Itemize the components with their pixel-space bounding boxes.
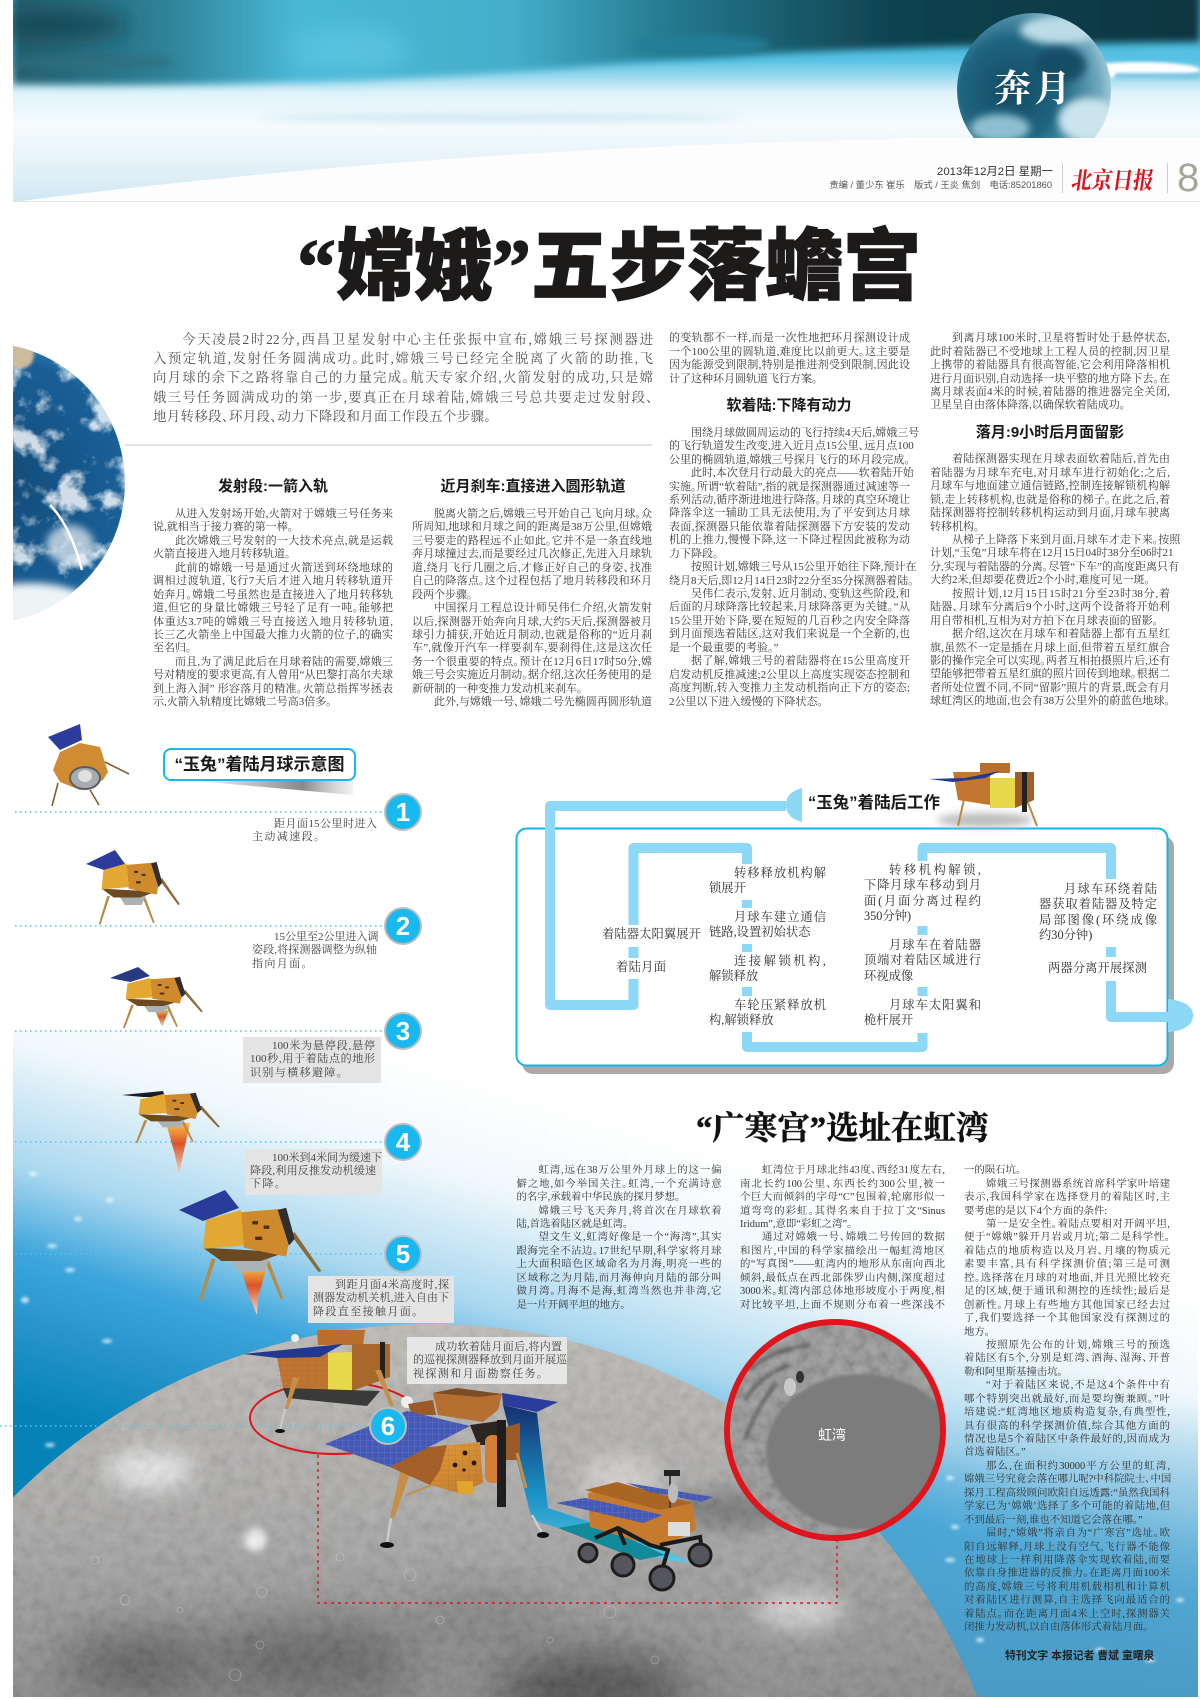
column: near-moon braking: 自己的降落点。这个过程包括了地月转移段和环月	[412, 575, 652, 587]
column: lunar landing: 用自带相机,互相为对方拍下在月球表面的留影。	[930, 615, 1158, 627]
column: soft landing: 降落伞这一辅助工具无法使用,为了平安到达月球	[669, 507, 910, 519]
step 1 text: 距月面15公里时进入	[274, 818, 377, 830]
main title: “嫦娥”五步落蟾宫	[297, 222, 921, 310]
intro paragraph: 娥三号任务圆满成功的第一步,要真正在月球着陆,嫦娥三号总共要走过发射段、	[153, 390, 653, 405]
Sinus Iridum column 3: 一的陨石坑。	[964, 1165, 1021, 1176]
lunar rover	[556, 1470, 713, 1590]
Sinus Iridum column 2: 倾斜,最低点在西北部侏罗山内侧,深度超过	[740, 1273, 945, 1284]
step 4 text: 降段,利用反推发动机缓速	[250, 1165, 376, 1177]
Sinus Iridum column 3: 阳自远解释,月球上没有空气,飞行器不能像	[964, 1542, 1170, 1553]
Sinus Iridum column 3: 具有很高的科学探测价值,综合其他方面的	[964, 1421, 1170, 1432]
flow step: wheel release: 构,解锁释放	[709, 1013, 774, 1027]
dotted height lines	[0, 812, 383, 1426]
step 2 text: 姿段,将探测器调整为纵轴	[252, 944, 377, 956]
moon surface	[13, 1320, 1013, 1699]
flow step: rover descends: 转移机构解锁,	[889, 863, 981, 877]
step 6 text box	[407, 1337, 567, 1384]
flow step: connector unlock: 解锁释放	[709, 969, 758, 983]
step 4 text: 100米到4米间为缓速下	[272, 1152, 382, 1164]
label: work after landing: “玉兔”着陆后工作	[808, 794, 940, 812]
landed lander, rear	[243, 1330, 394, 1433]
Sinus Iridum column 1: 望文生义,虹湾好像是一个“海湾”,其实	[538, 1232, 722, 1243]
column: lunar landing: 计划,“玉兔”月球车将在12月15日04时38分至06时21	[930, 547, 1174, 559]
page number: 8	[1177, 156, 1199, 200]
step 5 text	[313, 1278, 449, 1318]
Sinus Iridum column 3: 素要丰富,具有科学探测价值;第三是可测	[964, 1259, 1170, 1270]
date line: 2013年12月2日 星期一	[937, 166, 1053, 178]
column: launch stage: 火箭直接进入地月转移轨道。	[153, 548, 290, 560]
masthead divider	[1167, 163, 1168, 193]
step 3 text	[250, 1040, 375, 1079]
column: soft landing: 据了解,嫦娥三号的着陆器将在15公里高度开	[691, 655, 910, 667]
column: near-moon braking: 娥三号会实施近月制动。据介绍,这次任务使用的是	[412, 669, 652, 681]
Sinus Iridum column 3: 表示,我国科学家在选择登月的着陆区时,主	[964, 1192, 1170, 1203]
column: near-moon braking: 脱离火箭之后,嫦娥三号开始自己飞向月球。众	[434, 508, 652, 520]
Sinus Iridum column 3: 要考虑的是以下4个方面的条件:	[964, 1206, 1107, 1217]
Sinus Iridum column 2	[740, 1164, 945, 1311]
flow step: panorama: 月球车在着陆器	[889, 938, 981, 952]
column: soft landing: 高度判断,转入变推力主发动机指向正下方的姿态;	[669, 682, 910, 694]
editors line: 责编 / 董少东 崔乐 版式 / 王炎 焦剑 电话:85201860	[829, 180, 1052, 190]
column: near-moon braking: 奔月球撞过去,而是要经过几次修正,先进入月球轨	[412, 548, 652, 560]
column: launch stage: 示,火箭入轨精度比嫦娥二号高3倍多。	[153, 696, 332, 708]
step 4 text box	[245, 1149, 382, 1195]
badge 3: 3	[396, 1016, 410, 1046]
Sinus Iridum column 3: 第一是安全性。着陆点要相对开阔平坦,	[986, 1219, 1170, 1230]
crater inset: Sinus Iridum: 虹湾	[818, 1427, 846, 1443]
column: soft landing: 机的上推力,慢慢下降,这一下降过程因此被称为动	[669, 534, 910, 546]
column: launch stage: 调相过渡轨道,飞行7天后才进入地月转移轨道开	[153, 575, 393, 587]
Sinus Iridum column 1: 僻之地,如今举国关注。虹湾,一个充满诗意	[516, 1179, 722, 1190]
column: lunar landing: 球虹湾区的地面,也会有38万公里外的蔚蓝色地球。	[930, 695, 1170, 707]
Sinus Iridum column 3: 闭推力发动机,以自由落体形式着陆月面。	[964, 1622, 1148, 1633]
flow step: panorama	[864, 938, 981, 983]
Sinus Iridum column 1: 嫦娥三号飞天奔月,将首次在月球软着	[538, 1206, 722, 1217]
flow step: wheel release	[709, 998, 826, 1027]
column: launch stage: 长三乙火箭坐上中国最大推力火箭的位子,的确实	[153, 629, 393, 641]
Sinus Iridum column 2: 道弯弯的彩虹。其得名来自于拉丁文“Sinus	[740, 1206, 945, 1217]
column: near-moon braking: 新研制的一种变推力发动机来刹车。	[412, 683, 582, 695]
Sinus Iridum column 3: 的高度,嫦娥三号将利用机载相机和计算机	[964, 1582, 1170, 1593]
Sinus Iridum column 3: 嫦娥三号究竟会落在哪儿呢?中科院院士、中国	[964, 1474, 1171, 1485]
step 3 text: 100米为悬停段,悬停	[272, 1040, 375, 1052]
flow step: wing and mast: 月球车太阳翼和	[889, 998, 981, 1012]
column: soft landing: 15公里开始下降,要在短短的几百秒之内安全降落	[669, 615, 910, 627]
Sinus Iridum column 2: 通过对嫦娥一号、嫦娥二号传回的数据	[762, 1232, 945, 1243]
Sinus Iridum column 1: 跟海完全不沾边。17世纪早期,科学家将月球	[516, 1246, 722, 1257]
column: launch stage: 体重达3.7吨的嫦娥三号直接送入地月转移轨道,	[153, 616, 393, 628]
Sinus Iridum column 2: 的“写真图”——虹湾内的地形从东南向西北	[740, 1259, 945, 1270]
column: near-moon braking: 所周知,地球和月球之间的距离是38万公里,但嫦娥	[412, 521, 652, 533]
Sinus Iridum column 1: 是一片开阔平坦的地方。	[516, 1300, 626, 1311]
badge 1: 1	[396, 797, 410, 827]
red dashed leader line	[318, 1455, 837, 1603]
column: near-moon braking: 段两个步骤。	[412, 589, 472, 601]
badge 6: 6	[381, 1411, 395, 1441]
flow step: comm link: 月球车建立通信	[734, 910, 826, 924]
Sinus Iridum column 3: 届时,“嫦娥”将亲自为“广寒宫”选址。欧	[986, 1528, 1170, 1539]
flow step: rover descends	[864, 863, 981, 923]
column: launch stage	[153, 508, 393, 708]
badge 1	[385, 794, 421, 830]
badge 5: 5	[396, 1239, 410, 1269]
flow step: wheel release: 车轮压紧释放机	[734, 998, 826, 1012]
flow step: circling imaging: 局部图像(环绕成像	[1039, 913, 1157, 927]
Sinus Iridum column 3: 了,我们要选择一个其他国家没有探测过的	[964, 1313, 1170, 1324]
Sinus Iridum column 3: 创新性。月球上有些地方其他国家已经去过	[964, 1300, 1170, 1311]
Sinus Iridum column 2: 3000米。虹湾内部总体地形坡度小于两度,相	[740, 1286, 945, 1297]
decorative rule below intro	[125, 444, 652, 446]
column: soft landing: 的飞行轨道发生改变,进入近月点15公里、远月点100	[669, 440, 914, 452]
column: launch stage: 道,但它的身量比嫦娥三号轻了足有一吨。能够把	[153, 602, 393, 614]
column: lunar landing: 从梯子上降落下来到月面,月球车才走下来。按照	[952, 534, 1180, 546]
crater inset: Sinus Iridum	[720, 1320, 958, 1540]
Sinus Iridum column 1: 陆,首选着陆区就是虹湾。	[516, 1219, 628, 1230]
Sinus Iridum column 3: 便于“嫦娥”躲开月岩或月坑;第二是科学性。	[964, 1232, 1170, 1243]
Sinus Iridum column 3: 嫦娥三号探测器系统首席科学家叶培建	[986, 1179, 1170, 1190]
column: soft landing: 2公里以下进入缓慢的下降状态。	[669, 696, 823, 708]
Sinus Iridum column 3: 按照原先公布的计划,嫦娥三号的预选	[986, 1340, 1170, 1351]
Sinus Iridum column 1: 区域称之为月陆,而月海伸向月陆的部分叫	[516, 1273, 722, 1284]
column 4 continuation	[930, 332, 1170, 411]
step 6 text: 成功软着陆月面后,将内置	[435, 1341, 562, 1353]
column: soft landing: 吴伟仁表示,发射、近月制动、变轨这些阶段,和	[691, 588, 910, 600]
Sinus Iridum column 1: 的名字,承载着中华民族的探月梦想。	[516, 1192, 680, 1203]
column: lunar landing: 大约2米,但却要花费近2个小时,难度可见一斑。	[930, 574, 1150, 586]
step 4 text: 下降。	[250, 1178, 282, 1190]
flow step: separation: 两器分离开展探测	[1048, 961, 1147, 975]
step 1 text	[252, 818, 377, 843]
step 2 text: 15公里至2公里进入调	[274, 931, 378, 943]
column: launch stage: 到上海入洞” 形容落月的精准。火箭总指挥岑拯表	[153, 683, 393, 695]
column: soft landing: 此时,本次登月行动最大的亮点——软着陆开始	[691, 467, 914, 479]
heading: soft landing: 软着陆:下降有动力	[726, 397, 852, 414]
lander position 2	[86, 850, 180, 924]
red landing ellipse	[250, 1382, 420, 1454]
column: launch stage: 而且,为了满足此后在月球着陆的需要,嫦娥三	[175, 656, 393, 668]
column: lunar landing: 陆探测器将控制转移机构运动到月面,月球车驶离	[930, 507, 1170, 519]
byline: 特刊文字 本报记者 曹斌 童曙泉	[1005, 1650, 1154, 1662]
column: lunar landing: 月球车与地面建立通信链路,控制连接解锁机构解	[930, 480, 1170, 492]
Sinus Iridum column 3: 培建说:“虹湾地区地质构造复杂,有典型性,	[964, 1407, 1170, 1418]
blue space background	[13, 1031, 1198, 1697]
column: lunar landing: 转移机构。	[930, 521, 980, 533]
column: soft landing: 围绕月球做圆周运动的飞行持续4天后,嫦娥三号	[691, 427, 919, 439]
newspaper logo: 北京日报	[1070, 161, 1156, 195]
column: near-moon braking: 三号要走的路程远不止如此。它并不是一条直线地	[412, 535, 652, 547]
step 5 text: 降段直至接触月面。	[313, 1306, 419, 1318]
Sinus Iridum column 3: 不到最后一刻,谁也不知道它会落在哪。”	[964, 1515, 1143, 1526]
flow step: circling imaging	[1039, 882, 1157, 942]
step 5 text: 到距月面4米高度时,探	[335, 1279, 449, 1291]
column: lunar landing: 着陆器为月球车充电,对月球车进行初始化;之后,	[930, 467, 1170, 479]
intro paragraph: 今天凌晨2时22分,西昌卫星发射中心主任张振中宣布,嫦娥三号探测器进	[182, 332, 653, 347]
flow step: transfer unlock: 转移释放机构解	[734, 866, 826, 880]
badge 5	[385, 1236, 421, 1272]
column: near-moon braking: 以后,探测器开始奔向月球,大约5天后,探测器被月	[412, 616, 652, 628]
column: soft landing: 表面,探测器只能依靠着陆探测器下方安装的发动	[669, 521, 910, 533]
Sinus Iridum column 1: 上大面积暗色区域命名为月海,明亮一些的	[516, 1259, 722, 1270]
Sinus Iridum column 3: 足的区域,便于通讯和测控的连续性;最后是	[964, 1286, 1170, 1297]
column: lunar landing: 按照计划,12月15日15时21分至23时38分,着	[952, 588, 1170, 600]
flow step: circling imaging: 约30分钟)	[1039, 928, 1092, 942]
heading: launch stage: 发射段:一箭入轨	[218, 478, 328, 495]
column 3 continuation: 因为能源受到限制,特别是推进剂受到限制,因此设	[669, 359, 910, 371]
column 4 continuation: 此时着陆器已不受地球上工程人员的控制,因卫星	[930, 346, 1170, 358]
Sinus Iridum column 2: Iridum”,意即“彩虹之湾”。	[740, 1219, 852, 1230]
flow step: circling imaging: 月球车环绕着陆	[1064, 882, 1157, 896]
column: soft landing: 力下降段。	[669, 548, 718, 560]
heading: near-moon braking: 近月刹车:直接进入圆形轨道	[440, 478, 626, 495]
label shadow	[185, 780, 353, 795]
flow step: panorama: 环视成像	[864, 969, 913, 983]
Sinus Iridum column 3: 着陆点。而在距离月面4米上空时,探测器关	[964, 1609, 1170, 1620]
column: near-moon braking: 球引力捕获,开始近月制动,也就是俗称的“近月刹	[412, 629, 652, 641]
section tag: 奔月	[994, 58, 1074, 112]
Sinus Iridum column 3: 地方。	[964, 1327, 990, 1338]
flow step: solar wing: 着陆器太阳翼展开	[602, 927, 701, 941]
column: near-moon braking: 道,绕月飞行几圈之后,才修正好自己的身姿、找准	[412, 562, 652, 574]
column: launch stage: 至名归。	[153, 642, 192, 654]
step 5 text: 测器发动机关机,进入自由下	[313, 1292, 449, 1304]
column: launch stage: 此前的嫦娥一号是通过火箭送到环绕地球的	[175, 562, 393, 574]
flow step: rover descends: 350分钟)	[864, 909, 911, 923]
column: soft landing: 按照计划,嫦娥三号从15公里开始往下降,预计在	[691, 561, 916, 573]
lander on work panel	[929, 763, 1037, 827]
lander position 4 with plume	[122, 1091, 220, 1175]
Sinus Iridum column 3: 学家已为‘嫦娥’选择了多个可能的着陆地,但	[964, 1501, 1170, 1512]
Sinus Iridum column 3	[964, 1164, 1171, 1633]
Sinus Iridum column 3: 在地球上一样利用降落伞实现软着陆,而要	[964, 1555, 1170, 1566]
Sinus Iridum column 3: 控。选择落在月球的对地面,并且光照比较充	[964, 1273, 1170, 1284]
Sinus Iridum column 2: 虹湾位于月球北纬43度、西经31度左右,	[762, 1165, 945, 1176]
column 4 continuation: 卫星呈自由落体降落,以确保软着陆成功。	[930, 399, 1125, 411]
step 3 text: 100秒,用于着陆点的地形	[250, 1053, 375, 1065]
column: lunar landing: 望能够把带着五星红旗的照片回传到地球。根据二	[930, 668, 1170, 680]
column: soft landing: 是一个最重要的考验。”	[669, 642, 778, 654]
Sinus Iridum column 1: 做月湾。月海不是海,虹湾当然也并非湾,它	[516, 1286, 722, 1297]
flow step: rover descends: 面(月面分离过程约	[864, 894, 981, 908]
Sinus Iridum column 2: 和图片,中国的科学家描绘出一幅虹湾地区	[740, 1246, 945, 1257]
step 6 text: 的巡视探测器释放到月面开展巡	[413, 1354, 567, 1366]
column: launch stage: 说,就相当于接力赛的第一棒。	[153, 521, 293, 533]
Sinus Iridum column 3: 勒和阿里斯基撞击坑。	[964, 1367, 1063, 1378]
flow step: wing and mast	[864, 998, 981, 1027]
header banner: sky and moon	[0, 0, 1200, 202]
label: landing diagram title	[163, 748, 356, 781]
column: near-moon braking: 务一个很重要的特点。预计在12月6日17时50分,嫦	[412, 656, 652, 668]
label: landing diagram title: “玉兔”着陆月球示意图	[174, 755, 344, 774]
flow step: comm link: 链路,设置初始状态	[709, 925, 810, 939]
Sinus Iridum column 3: 着陆区有5个,分别是虹湾、酒海、湿海、开普	[964, 1353, 1170, 1364]
Sinus Iridum column 3: 首选着陆区。”	[964, 1447, 1026, 1458]
flow step: connector unlock	[709, 954, 826, 983]
column: lunar landing: 陆器、月球车分离后9个小时,这两个设备将开始利	[930, 601, 1170, 613]
column: near-moon braking: 车”,就像开汽车一样要刹车,要刹得住,这是这次任	[412, 642, 652, 654]
column: lunar landing: 者所处位置不同,不同“留影”照片的背景,既会有月	[930, 682, 1170, 694]
column: lunar landing: 分,实现与着陆器的分离。尽管“下车”的高度距离只有	[930, 561, 1179, 573]
column: lunar landing: 旗,虽然不一定是插在月球上面,但带着五星红旗合	[930, 642, 1170, 654]
column: launch stage: 始奔月。嫦娥二号虽然也是直接进入了地月转移轨	[153, 589, 393, 601]
step badges 1–6	[370, 794, 421, 1444]
heading: lunar landing: 落月:9小时后月面留影	[976, 424, 1124, 441]
column 3 continuation: 的变轨都不一样,而是一次性地把环月探测设计成	[669, 332, 910, 344]
column 3 continuation	[669, 332, 910, 385]
masthead divider	[1062, 163, 1063, 193]
Sinus Iridum column 3: 对着陆区进行测算,自主选择飞向最适合的	[964, 1595, 1170, 1606]
flow step: transfer unlock: 锁展开	[709, 881, 746, 895]
badge 2	[385, 908, 421, 944]
column: lunar landing: 影的操作完全可以实现。两者互相拍摄照片后,还有	[930, 655, 1170, 667]
Sinus Iridum column 1	[516, 1164, 722, 1311]
badge 6	[370, 1408, 406, 1444]
column: soft landing: 实施。所谓“软着陆”,指的就是探测器通过减速等一	[669, 481, 910, 493]
column: launch stage: 号对精度的要求更高,有人曾用“从巴黎打高尔夫球	[153, 669, 393, 681]
column: lunar landing: 据介绍,这次在月球车和着陆器上都有五星红	[952, 628, 1170, 640]
Sinus Iridum column 2: 个巨大而倾斜的字母“C”包围着,轮廓形似一	[740, 1192, 945, 1203]
flow step: wing and mast: 桅杆展开	[864, 1013, 913, 1027]
lander position 5 with plume	[179, 1190, 321, 1315]
landed lander, front	[325, 1388, 558, 1548]
Sinus Iridum column 3: 着陆点的地质构造以及月岩、月壤的物质元	[964, 1246, 1170, 1257]
flow connectors	[550, 806, 1170, 1047]
badge 4	[385, 1124, 421, 1160]
column: soft landing: 公里的椭圆轨道,嫦娥三号探月飞行的环月段完成。	[669, 454, 910, 466]
badge 3	[385, 1013, 421, 1049]
column: soft landing: 系列活动,循序渐进地进行降落。月球的真空环境让	[669, 494, 910, 506]
column 4 continuation: 进行月面识别,自动选择一块平整的地方降下去。在	[930, 373, 1170, 385]
Sinus Iridum column 3: “对于着陆区来说,不是这4个条件中有	[986, 1380, 1170, 1391]
column: lunar landing	[930, 452, 1180, 707]
step 3 text box	[243, 1037, 381, 1083]
flow step: landing surface: 着陆月面	[616, 960, 666, 974]
intro paragraph: 地月转移段、环月段、动力下降段和月面工作段五个步骤。	[153, 409, 491, 424]
Sinus Iridum column 2: 南北长约100公里、东西长约300公里,被一	[740, 1179, 945, 1190]
connector knob, top	[786, 788, 802, 822]
step 5 text box	[308, 1276, 454, 1323]
Sinus Iridum column 3: 哪个特别突出就最好,而是要均衡兼顾。”叶	[964, 1394, 1170, 1405]
column: soft landing: 绕月8天后,即12月14日23时22分至35分探测器着陆。	[669, 575, 914, 587]
teal ramp shadow	[558, 1522, 665, 1560]
flow step: transfer unlock	[709, 866, 826, 895]
flow step: rover descends: 下降月球车移动到月	[864, 878, 981, 892]
step 3 text: 识别与横移避障。	[250, 1067, 344, 1079]
Sinus Iridum column 3: 那么,在面积约30000平方公里的虹湾,	[986, 1461, 1170, 1472]
intro paragraph	[153, 332, 653, 424]
badge 2: 2	[396, 911, 410, 941]
column 4 continuation: 上携带的着陆器具有很高智能,它会利用降落相机	[930, 359, 1170, 371]
column: launch stage: 此次嫦娥三号发射的一大技术亮点,就是运载	[175, 535, 393, 547]
intro paragraph: 入预定轨道,发射任务圆满成功。此时,嫦娥三号已经完全脱离了火箭的助推,飞	[153, 351, 653, 366]
column: lunar landing: 着陆探测器实现在月球表面软着陆后,首先由	[952, 453, 1170, 465]
Sinus Iridum column 3: 依靠自身推进器的反推力。在距离月面100米	[964, 1568, 1170, 1579]
step 1 text: 主动减速段。	[252, 831, 321, 843]
column 3 continuation: 计了这种环月圆轨道飞行方案。	[669, 373, 818, 385]
column: near-moon braking	[412, 508, 652, 708]
Sinus Iridum column 3: 探月工程高级顾问欧阳自远透露:“虽然我国科	[964, 1488, 1170, 1499]
step 6 text: 视探测和月面勘察任务。	[413, 1368, 544, 1380]
step 6 text	[413, 1340, 567, 1380]
step 2 text: 指向月面。	[252, 958, 308, 970]
earth photo, clipped at the left margin	[13, 346, 125, 620]
work panel frame with shadow	[516, 828, 1174, 1074]
ramp from lander to rover	[503, 1405, 690, 1563]
intro paragraph: 向月球的余下之路将靠自己的力量完成。航天专家介绍,火箭发射的成功,只是嫦	[153, 370, 653, 385]
column: soft landing	[669, 426, 919, 708]
column 4 continuation: 到离月球100米时,卫星将暂时处于悬停状态,	[952, 332, 1170, 344]
column: near-moon braking: 中国探月工程总设计师吴伟仁介绍,火箭发射	[434, 602, 652, 614]
lander position 1, tilted	[48, 724, 129, 806]
connector knob, right	[1168, 999, 1193, 1032]
flow step: connector unlock: 连接解锁机构,	[734, 954, 826, 968]
step 2 text	[252, 930, 378, 970]
Sinus Iridum column 2: 对比较平坦,上面不规则分布着一些深浅不	[740, 1300, 945, 1311]
column 4 continuation: 离月球表面4米的时候,着陆器的推进器完全关闭,	[930, 386, 1170, 398]
step 4 text	[250, 1152, 382, 1190]
column: soft landing: 后面的月球降落比较起来,月球降落更为关键。“从	[669, 601, 910, 613]
column: near-moon braking: 此外,与嫦娥一号、嫦娥二号先椭圆再圆形轨道	[434, 696, 652, 708]
heading: Guanghan palace site: “广寒宫”选址在虹湾	[696, 1111, 989, 1147]
column: soft landing: 到月面预选着陆区,这对我们来说是一个全新的,也	[669, 628, 910, 640]
Sinus Iridum column 1: 虹湾,远在38万公里外月球上的这一偏	[538, 1165, 722, 1176]
column: lunar landing: 锁,走上转移机构,也就是俗称的梯子。在此之后,着	[930, 494, 1170, 506]
flow step: circling imaging: 器获取着陆器及特定	[1039, 897, 1157, 911]
column: launch stage: 从进入发射场开始,火箭对于嫦娥三号任务来	[175, 508, 393, 520]
Sinus Iridum column 3: 情况也是5个着陆区中条件最好的,因而成为	[964, 1434, 1170, 1445]
badge 4: 4	[396, 1127, 411, 1157]
lander position 3 with small plume	[110, 967, 203, 1028]
column 3 continuation: 一个100公里的圆轨道,难度比以前更大。这主要是	[669, 346, 910, 358]
flow step: panorama: 顶端对着陆区域进行	[864, 953, 981, 967]
column: soft landing: 启发动机反推减速;2公里以上高度实现姿态控制和	[669, 669, 910, 681]
flow step: comm link	[709, 910, 826, 939]
